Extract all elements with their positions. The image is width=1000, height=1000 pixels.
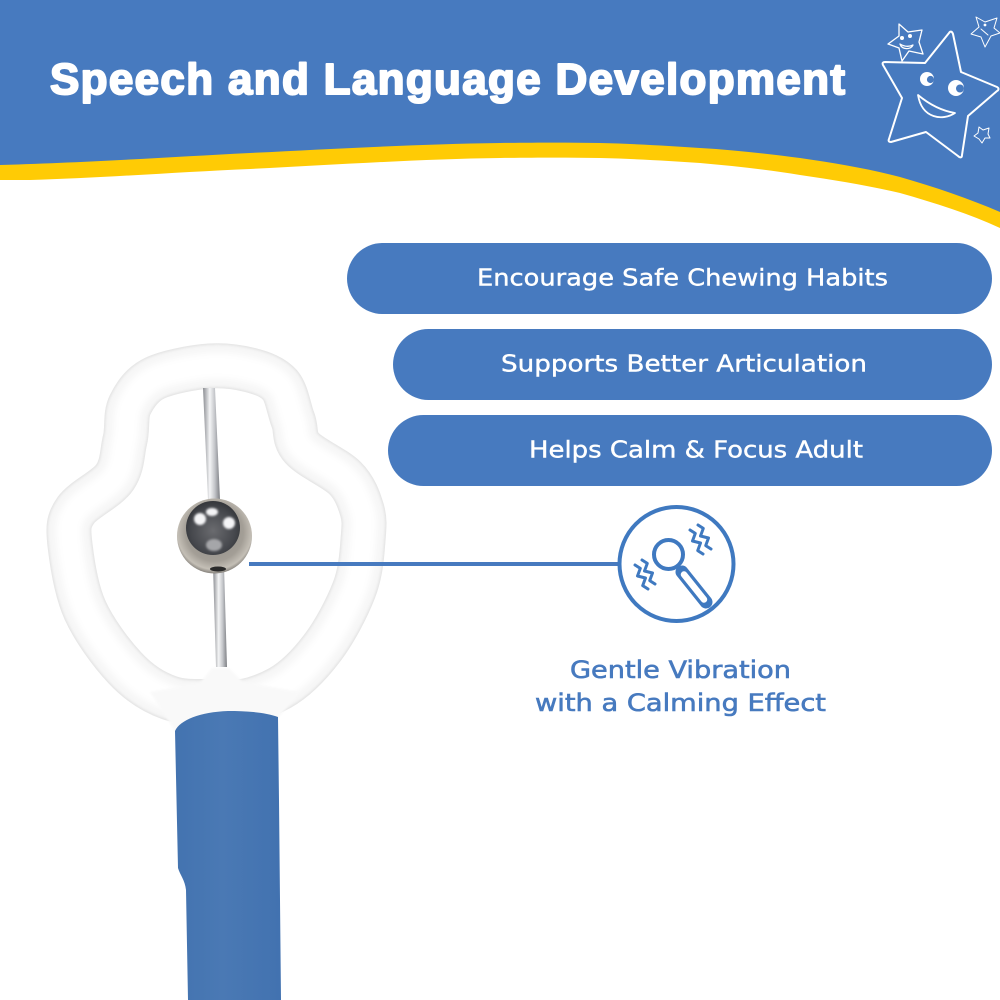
pill: articulation bbox=[393, 329, 992, 400]
icon: smiling stars bbox=[883, 17, 1000, 157]
icon: small star lower right bbox=[974, 127, 990, 143]
pill: calm and focus bbox=[388, 415, 992, 486]
icon: large star bbox=[883, 32, 998, 157]
icon: vibrating tool in circle bbox=[620, 507, 734, 621]
yellow wave stripe bbox=[0, 130, 1000, 228]
pill: articulation: Supports Better Articulation bbox=[501, 350, 867, 378]
icon: small star upper left bbox=[888, 24, 923, 61]
callout text: gentle vibration: with a Calming Effect bbox=[535, 689, 826, 717]
product: steel ball bbox=[177, 498, 252, 574]
pill: safe chewing bbox=[347, 243, 992, 314]
pill: calm and focus: Helps Calm & Focus Adult bbox=[529, 436, 863, 464]
product: white ring handle bbox=[69, 366, 364, 731]
ring base nub and flare bbox=[150, 668, 300, 731]
product: metal rods bbox=[203, 388, 227, 667]
callout text: gentle vibration: Gentle Vibration bbox=[570, 656, 791, 684]
connector line bbox=[249, 562, 620, 566]
callout text: gentle vibration bbox=[535, 656, 826, 717]
blue wave background bbox=[0, 0, 1000, 212]
product: shaft bbox=[175, 711, 281, 1000]
pill: safe chewing: Encourage Safe Chewing Habits bbox=[477, 264, 888, 292]
icon: small star upper right bbox=[971, 17, 1000, 47]
header banner bbox=[0, 0, 1000, 228]
title: Speech and Language Development bbox=[50, 55, 845, 104]
